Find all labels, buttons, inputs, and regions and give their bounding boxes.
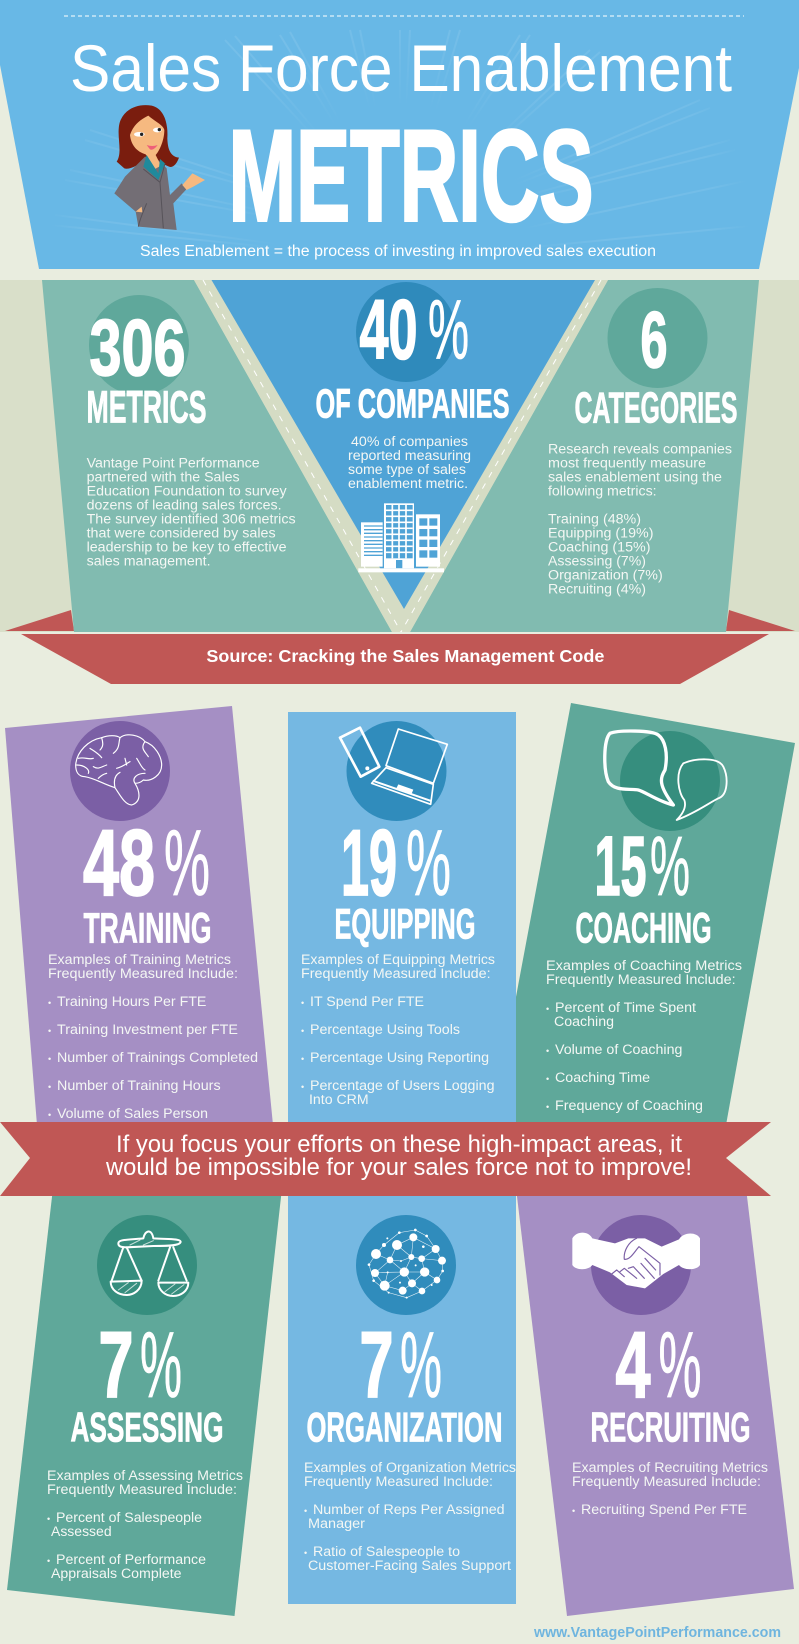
text block: enablement metric. — [348, 476, 468, 491]
text block: Number of Reps Per Assigned — [313, 1502, 505, 1517]
text block: Frequently Measured Include: — [546, 972, 736, 987]
text block — [47, 1468, 243, 1581]
text block: Examples of Equipping Metrics — [301, 952, 495, 967]
text block: Appraisals Complete — [51, 1566, 182, 1581]
text block: • — [48, 1110, 51, 1120]
label: equipping: EQUIPPING — [334, 900, 476, 948]
text block: Coaching — [554, 1014, 614, 1029]
panel: 306 metrics — [42, 280, 392, 632]
text block: • — [48, 998, 51, 1008]
text block: Volume of Coaching — [555, 1042, 682, 1057]
text block: Number of Training Hours — [57, 1078, 221, 1093]
text block — [301, 952, 495, 1107]
text block: Frequently Measured Include: — [47, 1482, 237, 1497]
text block: sales enablement using the — [548, 469, 722, 484]
text block: • — [301, 1082, 304, 1092]
banner: call to action: would be impossible for your sales force not to improve! — [105, 1154, 692, 1181]
text block: • — [301, 1026, 304, 1036]
text block: Training (48%) — [548, 511, 641, 526]
text block: Examples of Training Metrics — [48, 952, 231, 967]
text block: Coaching Time — [555, 1070, 650, 1085]
text block: • — [546, 1074, 549, 1084]
text block: Percent of Salespeople — [56, 1510, 202, 1525]
text block: Volume of Sales Person — [57, 1106, 208, 1121]
text block: Equipping (19%) — [548, 525, 654, 540]
text block: Assessing (7%) — [548, 553, 646, 568]
banner: call to action — [0, 1122, 771, 1196]
stat: 7%: 7 — [98, 1312, 134, 1417]
icon circle — [89, 295, 189, 395]
panel: 40% of companies — [194, 280, 608, 632]
text block: • — [48, 1026, 51, 1036]
text block: • — [301, 998, 304, 1008]
text block: Percentage Using Reporting — [310, 1050, 489, 1065]
icon circle — [356, 282, 456, 382]
label: metrics: METRICS — [86, 382, 206, 432]
icon: network — [356, 1215, 456, 1315]
stat: 306: 306 — [90, 303, 186, 392]
text block: • — [546, 1004, 549, 1014]
text block: Frequently Measured Include: — [48, 966, 238, 981]
icon circle — [608, 288, 708, 388]
text block: The survey identified 306 metrics — [87, 511, 296, 526]
text block — [572, 1460, 768, 1517]
text block: Vantage Point Performance — [87, 455, 260, 470]
label: assessing: ASSESSING — [70, 1404, 224, 1450]
text block: • — [48, 1082, 51, 1092]
banner: source — [21, 634, 769, 684]
stat: 7%: 7 — [360, 1312, 394, 1417]
text block: • — [546, 1046, 549, 1056]
dashed rule — [64, 15, 744, 17]
icon: businesswoman — [114, 105, 205, 230]
text block: Percent of Time Spent — [555, 1000, 696, 1015]
stat: 4%: % — [658, 1312, 702, 1417]
text block: • — [304, 1548, 307, 1558]
text block: Coaching (15%) — [548, 539, 650, 554]
text block: some type of sales — [348, 462, 466, 477]
label: of companies: OF COMPANIES — [316, 380, 510, 426]
text block: Organization (7%) — [548, 567, 663, 582]
text block: Number of Trainings Completed — [57, 1050, 258, 1065]
stat: 48%: 48 — [83, 810, 155, 915]
text block — [546, 958, 742, 1113]
text block: that were considered by sales — [87, 525, 276, 540]
tagline: Sales Enablement = the process of investing in improved sales execution — [140, 243, 656, 260]
text block — [48, 952, 258, 1121]
panel: equipping — [288, 712, 516, 1152]
text block: sales management. — [87, 553, 211, 568]
icon: scales — [97, 1215, 197, 1315]
stat: 6: 6 — [640, 295, 668, 384]
icon: brain — [70, 721, 170, 821]
text block: • — [47, 1514, 50, 1524]
text block: Frequently Measured Include: — [301, 966, 491, 981]
stat: 40%: % — [428, 282, 469, 376]
icon: phone and laptop — [340, 721, 447, 821]
text block: Examples of Organization Metrics — [304, 1460, 516, 1475]
stat: 7%: % — [140, 1312, 182, 1417]
text block: Frequency of Coaching — [555, 1098, 703, 1113]
text block: Percent of Performance — [56, 1552, 206, 1567]
text block: leadership to be key to effective — [87, 539, 287, 554]
text block: Assessed — [51, 1524, 112, 1539]
text block: Customer-Facing Sales Support — [308, 1558, 511, 1573]
text block: Training Investment per FTE — [57, 1022, 238, 1037]
text block: Recruiting (4%) — [548, 581, 646, 596]
text block: 40% of companies — [351, 434, 468, 449]
stat: 4%: 4 — [616, 1312, 650, 1417]
text block: Education Foundation to survey — [87, 483, 287, 498]
icon: speech bubbles — [605, 731, 727, 831]
stat: 7%: % — [400, 1312, 442, 1417]
text block — [348, 434, 471, 491]
text block: Research reveals companies — [548, 441, 732, 456]
text block — [87, 455, 296, 568]
panel: coaching — [492, 703, 795, 1125]
text block: IT Spend Per FTE — [310, 994, 424, 1009]
stat: 19%: 19 — [341, 810, 397, 915]
panel: 6 categories — [410, 280, 759, 632]
text block — [548, 441, 732, 596]
text block: • — [48, 1054, 51, 1064]
text block: Percentage of Users Logging — [310, 1078, 494, 1093]
label: organization: ORGANIZATION — [306, 1404, 502, 1450]
text block: partnered with the Sales — [87, 469, 240, 484]
text block: Frequently Measured Include: — [304, 1474, 493, 1489]
stat: 48%: % — [164, 810, 210, 915]
text block: dozens of leading sales forces. — [87, 497, 282, 512]
text block: Examples of Assessing Metrics — [47, 1468, 243, 1483]
panel: training — [5, 706, 273, 1125]
panel: recruiting — [516, 1188, 794, 1616]
stat: 15%: 15 — [594, 819, 646, 913]
text block: Percentage Using Tools — [310, 1022, 460, 1037]
title: Sales Force Enablement — [70, 31, 732, 105]
text block: following metrics: — [548, 483, 657, 498]
banner: call to action: If you focus your efforts on these high-impact areas, it — [116, 1131, 682, 1158]
text block: Ratio of Salespeople to — [313, 1544, 460, 1559]
text block: reported measuring — [348, 448, 471, 463]
text block: • — [546, 1102, 549, 1112]
panel: stats band background — [0, 280, 799, 632]
stat: 15%: % — [650, 819, 690, 913]
banner: source: Source: Cracking the Sales Management Code — [206, 646, 605, 666]
text block — [304, 1460, 516, 1573]
text block: Examples of Recruiting Metrics — [572, 1460, 768, 1475]
text block: most frequently measure — [548, 455, 706, 470]
stat: 40%: 40 — [360, 282, 418, 376]
panel: assessing — [7, 1188, 282, 1616]
text block: Examples of Coaching Metrics — [546, 958, 742, 973]
panel: organization — [288, 1150, 516, 1604]
heading: metrics: METRICS — [228, 102, 594, 248]
text block: • — [47, 1556, 50, 1566]
website url: www.VantagePointPerformance.com — [533, 1624, 781, 1641]
text block: Into CRM — [309, 1092, 369, 1107]
icon: office buildings — [358, 503, 444, 572]
panel: header — [0, 0, 799, 269]
text block: • — [572, 1506, 575, 1516]
stat: 19%: % — [406, 810, 451, 915]
text block: • — [304, 1506, 307, 1516]
text block: Recruiting Spend Per FTE — [581, 1502, 747, 1517]
text block: • — [301, 1054, 304, 1064]
text block: Training Hours Per FTE — [57, 994, 206, 1009]
text block: Frequently Measured Include: — [572, 1474, 761, 1489]
label: training: TRAINING — [84, 904, 212, 952]
icon: handshake — [572, 1215, 700, 1315]
text block: Manager — [308, 1516, 366, 1531]
